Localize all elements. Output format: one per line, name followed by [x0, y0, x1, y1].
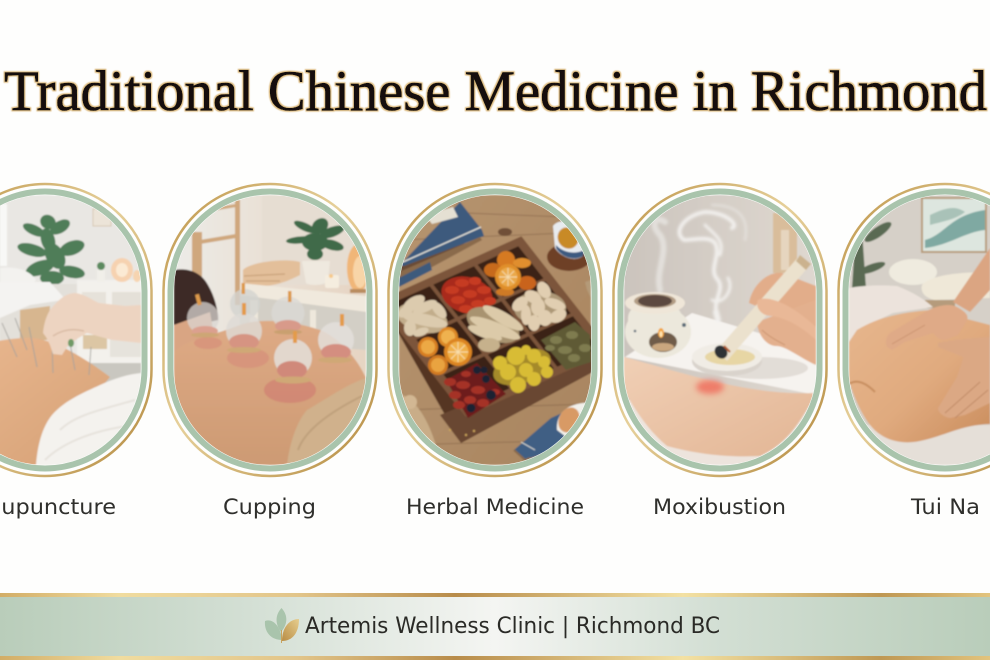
bottom gold bar — [0, 656, 990, 660]
photo: herbal medicine tray — [399, 195, 591, 465]
photo: cupping treatment — [174, 195, 369, 465]
panel: tui na — [838, 184, 990, 519]
top gold bar — [0, 593, 990, 597]
sage band — [0, 597, 990, 656]
photo: acupuncture treatment — [0, 195, 141, 465]
photo: moxibustion treatment — [624, 195, 816, 465]
green ring — [0, 192, 144, 468]
green ring — [396, 192, 594, 468]
panel: herbal medicine — [376, 184, 611, 519]
photo: tui na massage — [849, 195, 990, 465]
footer band — [0, 593, 990, 660]
label: Herbal Medicine: Herbal Medicine — [406, 495, 584, 519]
green ring — [846, 192, 990, 468]
gold ring — [164, 184, 376, 476]
green ring — [620, 192, 820, 468]
icon: leaf logo — [265, 608, 299, 643]
title: Traditional Chinese Medicine in Richmond — [4, 60, 987, 123]
green ring — [170, 192, 370, 468]
gold ring — [0, 184, 152, 476]
label: Moxibustion: Moxibustion — [653, 495, 786, 519]
label: Tui Na: Tui Na — [910, 495, 980, 519]
panel: acupuncture — [0, 184, 152, 519]
footer text: Artemis Wellness Clinic | Richmond BC — [305, 614, 720, 639]
panel: moxibustion — [614, 184, 826, 519]
label: Cupping: Cupping — [223, 495, 316, 519]
gold ring — [388, 184, 602, 476]
gold ring — [614, 184, 826, 476]
panel: cupping — [164, 184, 376, 519]
gold ring — [838, 184, 990, 476]
